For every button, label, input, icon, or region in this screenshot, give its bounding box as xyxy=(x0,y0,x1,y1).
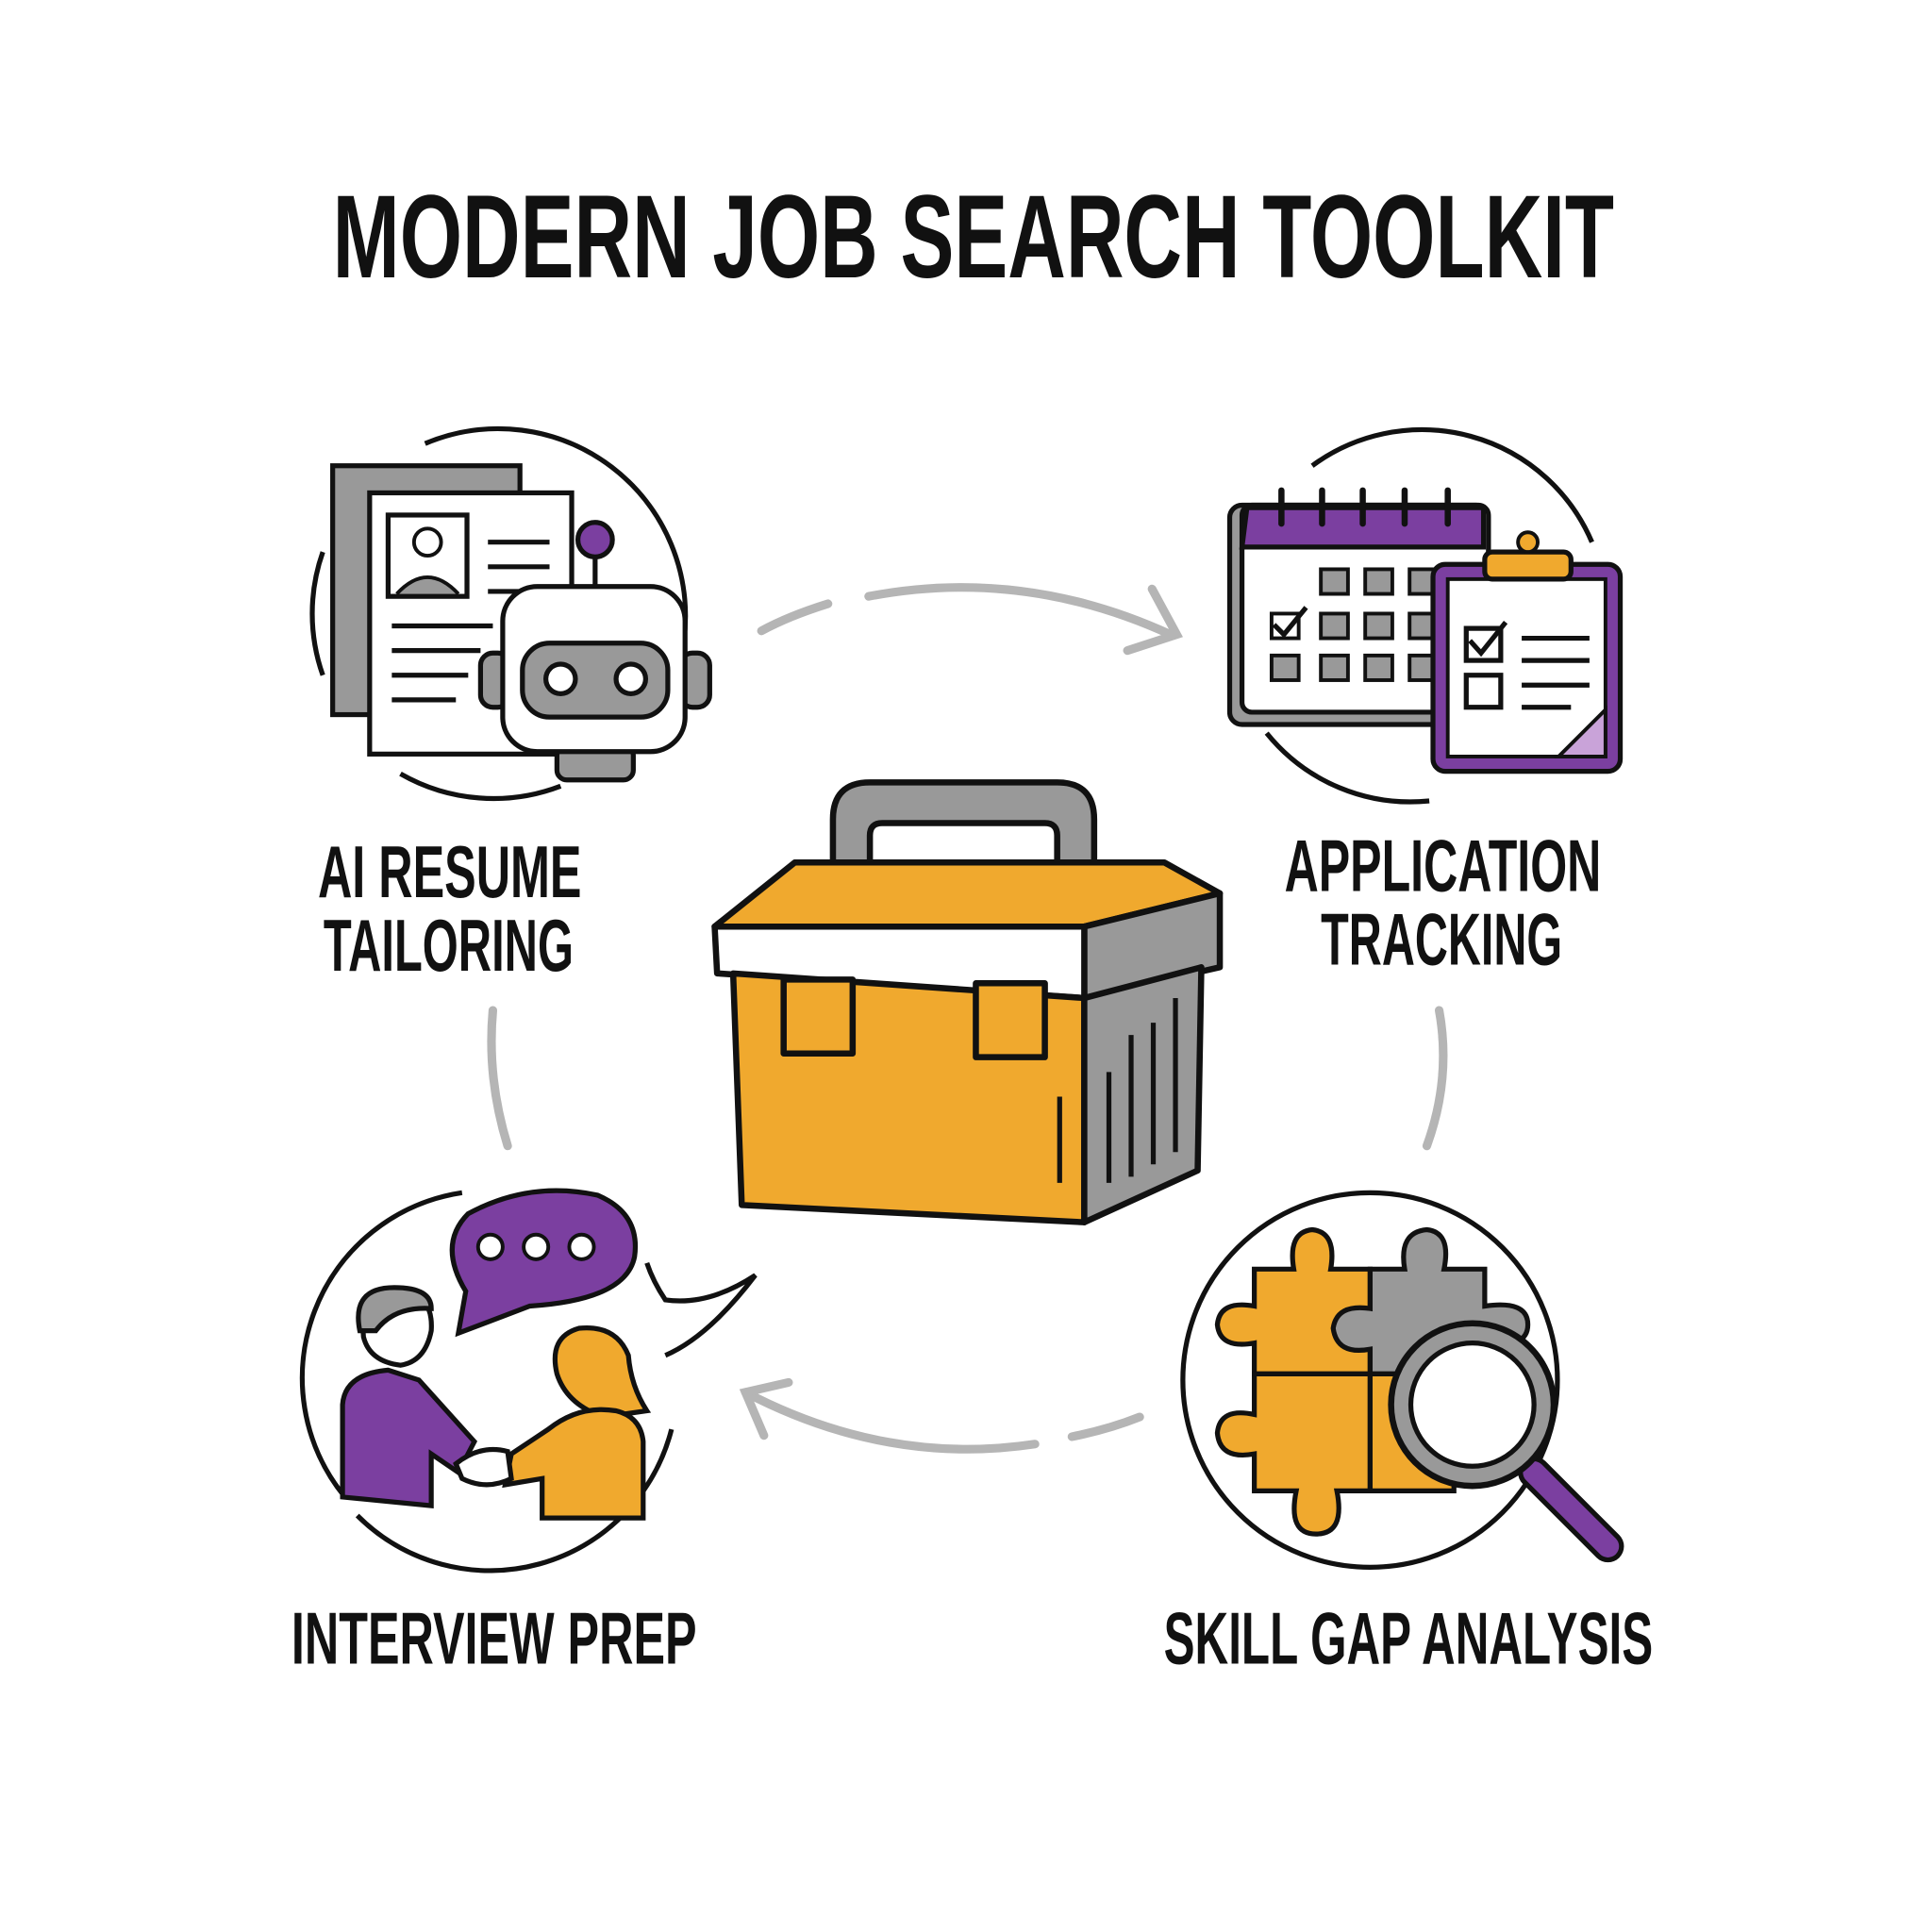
arrow: left connector xyxy=(491,1010,508,1146)
label: application tracking: TRACKING xyxy=(1321,898,1562,981)
icon: AI resume xyxy=(312,428,709,798)
label: AI resume tailoring xyxy=(318,830,581,987)
label: skill gap analysis: SKILL GAP ANALYSIS xyxy=(1164,1596,1653,1679)
arrow: top cycle xyxy=(761,588,1176,651)
label: AI resume tailoring: TAILORING xyxy=(324,904,574,987)
label: interview prep: INTERVIEW PREP xyxy=(291,1596,697,1679)
arrow: right connector xyxy=(1426,1010,1443,1146)
icon: toolbox xyxy=(715,782,1220,1223)
icon: application tracking xyxy=(1230,430,1621,802)
label: AI resume tailoring: AI RESUME xyxy=(318,830,581,913)
icon: interview prep xyxy=(302,1191,756,1571)
arrow: bottom cycle xyxy=(745,1382,1140,1449)
label: application tracking xyxy=(1285,824,1601,981)
label: application tracking: APPLICATION xyxy=(1285,824,1601,907)
icon: skill gap analysis xyxy=(1183,1192,1607,1567)
